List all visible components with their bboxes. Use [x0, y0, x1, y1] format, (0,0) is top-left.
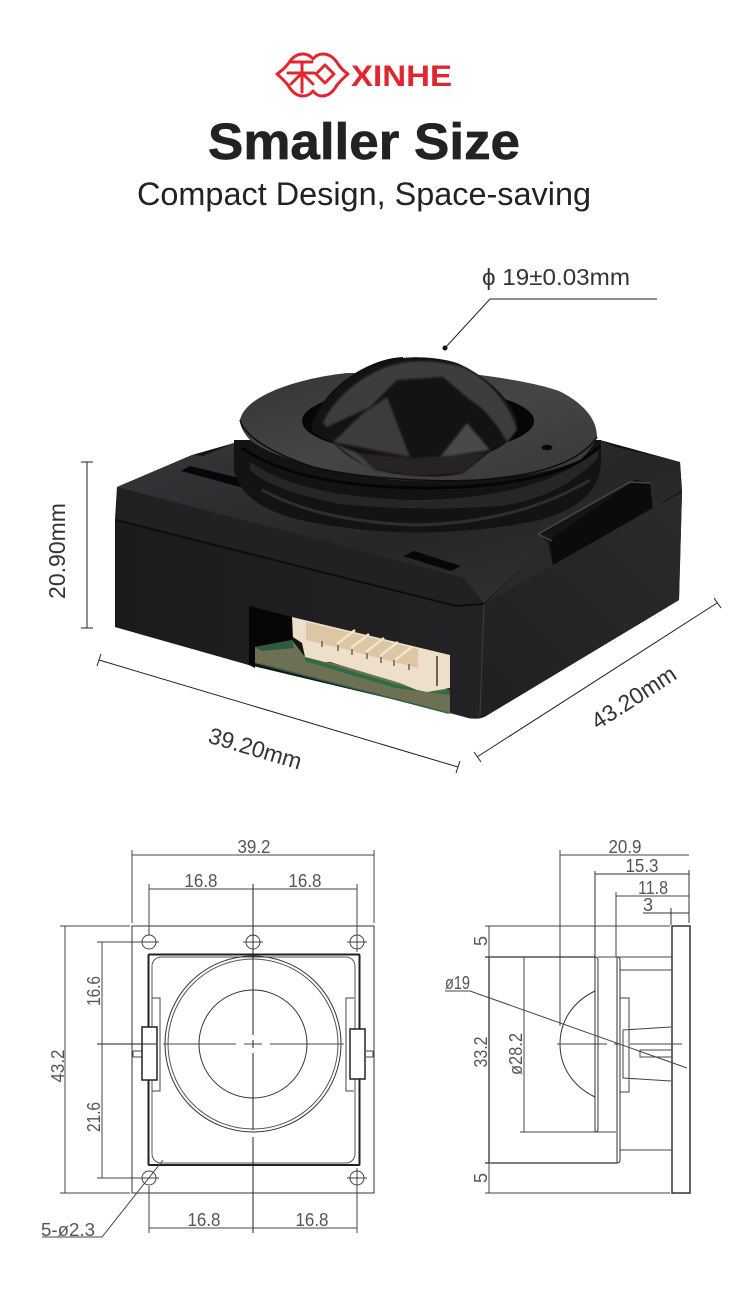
dimension 5 bottom: 5	[471, 1173, 491, 1183]
dimension: depth	[474, 598, 721, 762]
title: Smaller Size	[208, 113, 520, 170]
indicator dot	[542, 445, 552, 450]
logo	[277, 54, 452, 96]
ring hole	[302, 388, 534, 454]
dimension 43.2	[48, 926, 130, 1193]
connector	[292, 617, 450, 692]
module front face	[115, 520, 484, 719]
circuit board	[255, 640, 450, 714]
dimension 20.9	[560, 837, 689, 1026]
dimension 21.6	[84, 1044, 140, 1178]
dimension: height	[44, 462, 93, 628]
centre lines	[97, 884, 253, 1233]
diameter 19 leader: ø19	[445, 973, 470, 993]
subtitle: Compact Design, Space-saving	[137, 176, 591, 212]
logo wordmark: XINHE	[351, 60, 452, 93]
ring circles	[165, 956, 341, 1132]
dimension 15.3: 15.3	[626, 856, 658, 876]
dimension: width: 39.20mm	[206, 722, 305, 774]
dimension 21.6: 21.6	[84, 1102, 104, 1132]
dimension 39.2	[132, 837, 374, 923]
dimension 11.8: 11.8	[638, 878, 668, 898]
product photo: trackball module	[115, 357, 682, 719]
dimension 16.6	[84, 942, 140, 1044]
ball dome	[560, 991, 595, 1097]
body details	[598, 957, 672, 1150]
dimension: width	[97, 654, 460, 774]
dimension diameter 28.2: ø28.2	[506, 1033, 526, 1075]
top surface of plate	[117, 440, 682, 603]
dimension 16.8 top	[149, 871, 357, 935]
dimension 5 top	[471, 926, 670, 957]
side groove	[550, 480, 652, 565]
centre line	[557, 1043, 682, 1045]
dimension 3: 3	[643, 895, 653, 915]
flanges	[595, 957, 620, 1163]
hole callout	[41, 1160, 163, 1240]
diameter 19 leader	[445, 973, 687, 1068]
logo emblem	[277, 54, 348, 96]
dimension 33.2	[471, 957, 617, 1163]
dimension 5 top: 5	[471, 936, 491, 946]
top ring	[240, 373, 597, 481]
callout: ball diameter: ϕ 19±0.03mm	[482, 264, 630, 290]
callout: ball diameter	[442, 264, 657, 350]
dimension 43.2: 43.2	[48, 1050, 68, 1082]
dimension 33.2: 33.2	[471, 1036, 491, 1068]
dimension 16.6: 16.6	[84, 976, 104, 1006]
side clips	[133, 998, 373, 1091]
module right side	[450, 492, 682, 719]
dimension diameter 28.2	[506, 957, 615, 1132]
inner housing	[148, 954, 360, 1165]
dimension 39.2: 39.2	[238, 837, 270, 857]
dimension 16.8 bottom: 16.8	[296, 1210, 328, 1230]
front band of plate	[116, 487, 484, 606]
dimension 20.9: 20.9	[608, 837, 642, 857]
dimension 3	[643, 870, 689, 925]
dimension 16.8 bottom: 16.8	[188, 1210, 220, 1230]
dimension: depth: 43.20mm	[586, 660, 681, 734]
dimension 16.8 top: 16.8	[288, 871, 322, 891]
dimension 16.8 bottom	[149, 1186, 357, 1233]
dimension 11.8	[616, 878, 689, 957]
corner wedge beside groove	[484, 543, 553, 604]
dimension 15.3	[595, 856, 689, 957]
module silhouette	[115, 440, 682, 719]
back plate	[672, 926, 690, 1193]
mounting holes	[139, 932, 367, 1188]
plate slots	[181, 466, 247, 487]
board opening	[249, 606, 292, 668]
technical drawing: side view	[445, 837, 690, 1193]
lower collar	[234, 440, 601, 532]
technical drawing: top view	[41, 837, 374, 1240]
outer plate	[132, 926, 374, 1193]
dimension 5 bottom	[471, 1163, 670, 1193]
black ball	[312, 357, 517, 477]
hole callout: 5-ø2.3	[41, 1220, 95, 1240]
dimension 16.8 top: 16.8	[184, 871, 218, 891]
dimension: height: 20.90mm	[44, 503, 70, 599]
